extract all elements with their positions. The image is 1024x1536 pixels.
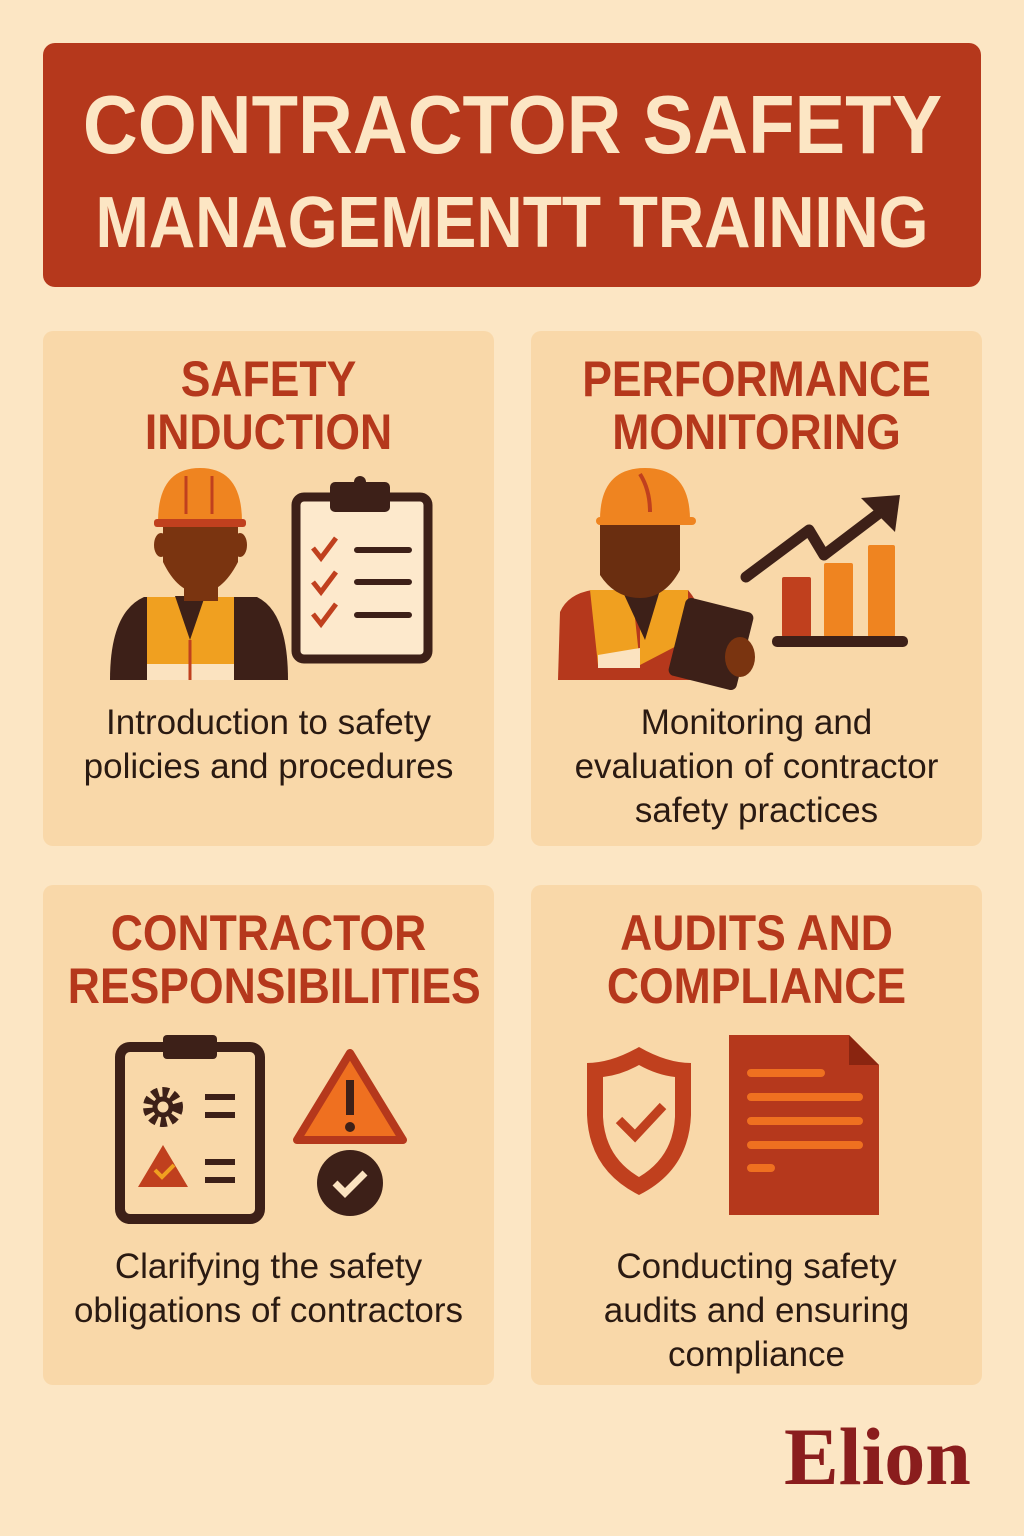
heading: CONTRACTOR xyxy=(111,905,426,961)
description: safety practices xyxy=(635,791,878,830)
heading: RESPONSIBILITIES xyxy=(68,958,481,1014)
heading xyxy=(145,351,392,460)
description: compliance xyxy=(668,1335,845,1374)
title: MANAGEMENTT TRAINING xyxy=(96,183,928,263)
description: policies and procedures xyxy=(84,747,453,786)
panel: safety induction xyxy=(43,331,494,846)
heading xyxy=(582,351,931,460)
panel: performance monitoring xyxy=(531,331,982,846)
description xyxy=(604,1247,909,1374)
description: Introduction to safety xyxy=(106,703,431,742)
heading: MONITORING xyxy=(612,404,901,460)
description: Conducting safety xyxy=(616,1247,897,1286)
description xyxy=(575,703,938,830)
title: CONTRACTOR SAFETY xyxy=(83,78,942,171)
heading xyxy=(68,905,481,1014)
icon: worker with checklist xyxy=(110,468,432,680)
icon: worker with chart xyxy=(558,468,908,690)
heading xyxy=(607,905,906,1014)
heading: PERFORMANCE xyxy=(582,351,931,407)
description: audits and ensuring xyxy=(604,1291,909,1330)
icon: shield and document xyxy=(587,1035,879,1215)
panel: audits and compliance xyxy=(531,885,982,1385)
description: Clarifying the safety xyxy=(115,1247,422,1286)
description xyxy=(74,1247,463,1330)
title xyxy=(43,43,981,287)
logo: Elion: Elion xyxy=(784,1411,971,1502)
description: obligations of contractors xyxy=(74,1291,463,1330)
description: evaluation of contractor xyxy=(575,747,938,786)
heading: AUDITS AND xyxy=(620,905,893,961)
panel: contractor responsibilities xyxy=(43,885,494,1385)
icon: clipboard and warning xyxy=(115,1035,407,1224)
heading: COMPLIANCE xyxy=(607,958,906,1014)
heading: SAFETY xyxy=(181,351,356,407)
description: Monitoring and xyxy=(641,703,872,742)
heading: INDUCTION xyxy=(145,404,392,460)
description xyxy=(84,703,453,786)
